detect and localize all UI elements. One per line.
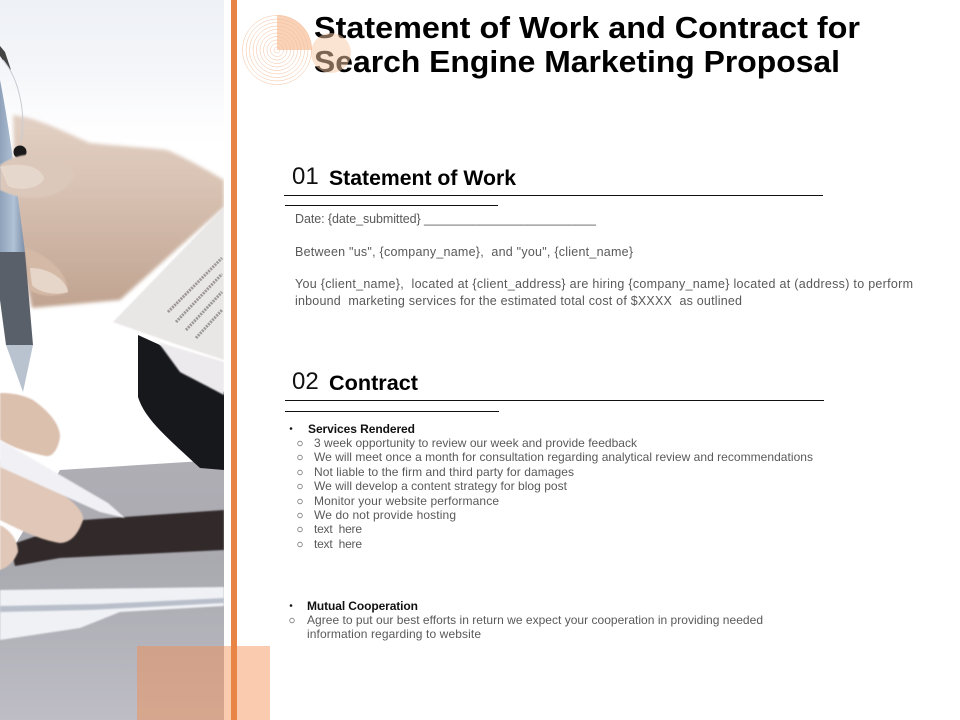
list: services rendered: Not liable to the firm and third party for damages — [314, 465, 574, 479]
photo: hands holding pens over a document — [0, 0, 224, 720]
list: services rendered: text here — [314, 537, 362, 551]
list: mutual cooperation: Agree to put our best efforts in return we expect your cooperation in providing needed — [307, 613, 763, 627]
lower fingers — [0, 393, 60, 456]
upper fingertip and nail — [0, 154, 54, 197]
list: mutual cooperation: Mutual Cooperation — [307, 599, 418, 613]
heading rules — [285, 400, 824, 412]
list: services rendered: We do not provide hosting — [314, 508, 456, 522]
list: services rendered: We will meet once a month for consultation regarding analytical review and recommendations — [314, 450, 813, 464]
list: services rendered: We will develop a content strategy for blog post — [314, 479, 568, 493]
list: services rendered: Monitor your website performance — [314, 494, 499, 508]
body text: statement details: You {client_name}, located at {client_address} are hiring {company_name} located at (address) to perform — [295, 277, 913, 291]
section number 02: 02 — [292, 368, 319, 395]
document in hand — [113, 207, 224, 360]
list: services rendered — [290, 422, 813, 551]
section 01: statement of work — [284, 163, 913, 308]
heading: statement of work: Statement of Work — [329, 167, 516, 190]
body text: statement details — [295, 212, 913, 308]
desk surface — [0, 460, 224, 720]
title: Search Engine Marketing Proposal — [314, 44, 840, 79]
heading rules — [284, 196, 823, 206]
upper hand — [13, 115, 224, 308]
heading: contract: Contract — [329, 372, 418, 395]
list: services rendered: Services Rendered — [308, 422, 415, 436]
icon: concentric circle motif — [242, 15, 351, 84]
list: mutual cooperation: information regarding to website — [307, 627, 481, 641]
vertical orange rule — [231, 0, 237, 720]
list: services rendered: text here — [314, 522, 362, 536]
lower fingertip and nail — [25, 248, 68, 296]
list: services rendered: 3 week opportunity to review our week and provide feedback — [314, 436, 638, 450]
dark sleeve — [138, 335, 224, 470]
list: mutual cooperation — [290, 599, 763, 641]
section number 01: 01 — [292, 163, 319, 190]
accent block: translucent orange square — [137, 646, 270, 720]
white pen — [0, 440, 125, 518]
body text: statement details: Date: {date_submitted} _________________________ — [295, 212, 597, 226]
blue pen — [0, 80, 25, 252]
body text: statement details: Between "us", {company_name}, and "you", {client_name} — [295, 245, 633, 259]
body text: statement details: inbound marketing services for the estimated total cost of $XXXX as outlined — [295, 294, 742, 308]
title: Statement of Work and Contract for — [314, 10, 860, 45]
title — [314, 10, 860, 79]
section 02: contract — [285, 368, 824, 641]
